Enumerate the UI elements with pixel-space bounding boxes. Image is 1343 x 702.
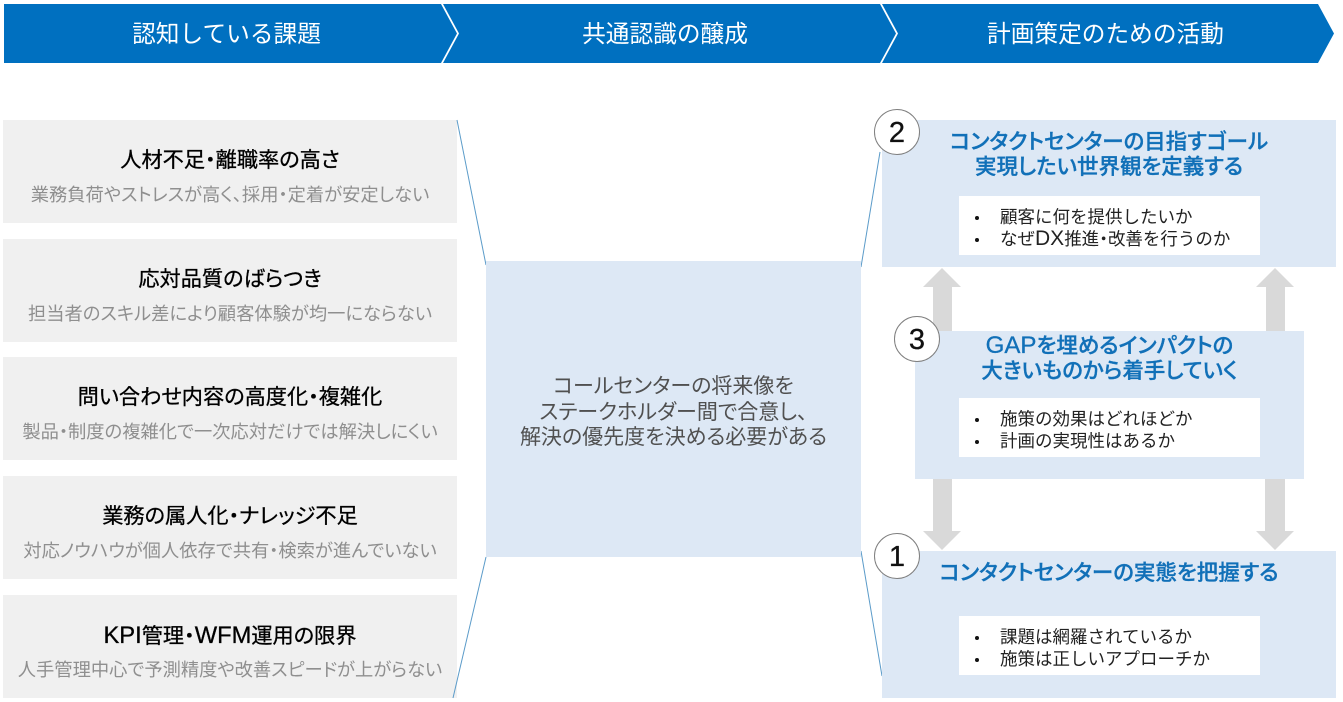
panel: issue 1: 業務負荷やストレスが高く、採用・定着が安定しない: [31, 184, 429, 205]
panel: issue 4: 対応ノウハウが個人依存で共有・検索が進んでいない: [23, 540, 437, 561]
panel: step 1 current state: [882, 551, 1336, 698]
panel: central consensus message: 解決の優先度を決める必要がある: [520, 426, 827, 449]
panel: issue 5: KPI管理・WFM運用の限界: [103, 623, 357, 649]
icon: number 3 badge: [894, 316, 940, 362]
panel: issue 1: [3, 120, 457, 223]
panel: issue 5: 人手管理中心で予測精度や改善スピードが上がらない: [18, 659, 442, 680]
panel: step 3 gap: [915, 331, 1304, 479]
heading: step 3: 大きいものから着手していく: [981, 359, 1238, 383]
panel: step 2 goal: [882, 120, 1336, 267]
header: recognized issues: 認知している課題: [132, 22, 321, 48]
list: step 2 questions: [959, 196, 1260, 255]
panel: issue 3: 製品・制度の複雑化で一次応対だけでは解決しにくい: [22, 421, 438, 442]
icon: number 3 badge: 3: [909, 324, 925, 356]
list: step 3 questions: [959, 398, 1260, 457]
panel: issue 2: 応対品質のばらつき: [138, 268, 322, 291]
icon: number 1 badge: 1: [889, 541, 905, 573]
panel: issue 5: [3, 595, 457, 698]
panel: central consensus message: ステークホルダー間で合意し、: [539, 400, 808, 424]
heading: step 3: [981, 332, 1238, 383]
panel: issue 2: [3, 239, 457, 342]
panel: central consensus message: [486, 261, 861, 557]
list: step 2 questions: なぜDX推進・改善を行うのか: [1000, 227, 1230, 250]
list: step 3 questions: 計画の実現性はあるか: [1000, 431, 1175, 451]
panel: issue 3: 問い合わせ内容の高度化・複雑化: [78, 386, 382, 409]
list: step 1 questions: [959, 616, 1260, 675]
list: step 1 questions: 施策は正しいアプローチか: [1000, 649, 1210, 669]
list: step 3 questions: 施策の効果はどれほどか: [1000, 409, 1192, 429]
panel: issue 4: [3, 476, 457, 579]
header: planning activities: 計画策定のための活動: [987, 22, 1224, 48]
heading: step 2: コンタクトセンターの目指すゴール: [950, 130, 1268, 154]
panel: issue 1: 人材不足・離職率の高さ: [120, 149, 340, 172]
panel: issue 2: 担当者のスキル差により顧客体験が均一にならない: [28, 303, 432, 324]
list: step 2 questions: 顧客に何を提供したいか: [1000, 207, 1192, 227]
heading: step 2: [950, 130, 1268, 179]
header: building shared understanding: 共通認識の醸成: [582, 22, 748, 48]
panel: issue 4: 業務の属人化・ナレッジ不足: [102, 505, 358, 528]
heading: step 3: GAPを埋めるインパクトの: [986, 332, 1233, 359]
heading: step 2: 実現したい世界観を定義する: [975, 155, 1243, 179]
list: step 1 questions: 課題は網羅されているか: [1000, 627, 1192, 647]
panel: central consensus message: コールセンターの将来像を: [553, 375, 794, 398]
icon: number 1 badge: [874, 533, 920, 579]
heading: step 1: コンタクトセンターの実態を把握する: [940, 561, 1278, 585]
icon: number 2 badge: 2: [889, 117, 905, 149]
panel: issue 3: [3, 357, 457, 460]
icon: number 2 badge: [874, 109, 920, 155]
